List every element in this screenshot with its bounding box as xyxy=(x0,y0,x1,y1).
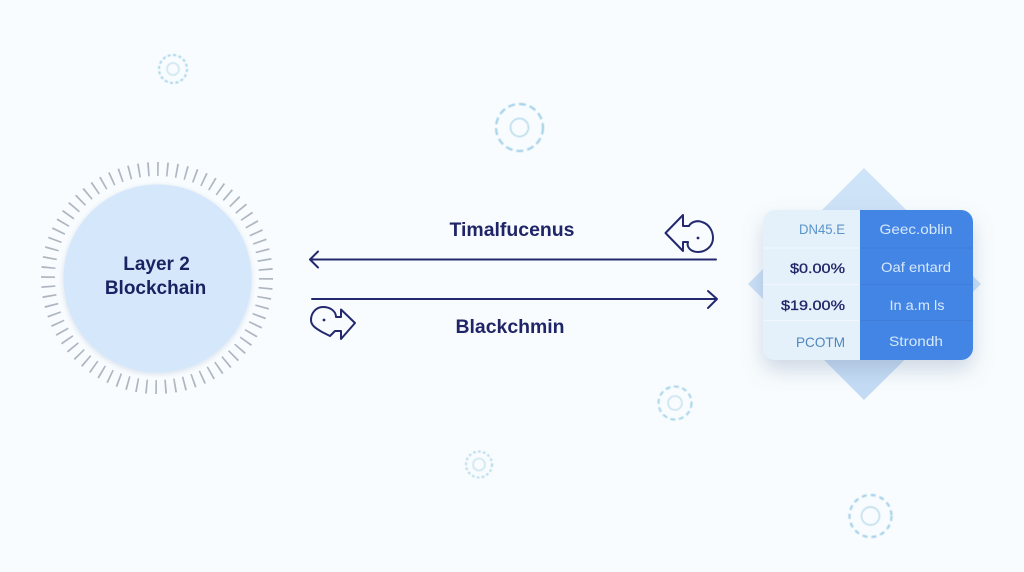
left column values: $0.00% xyxy=(790,260,845,276)
disc label: Layer 2 xyxy=(123,254,190,275)
left column values: $19.00% xyxy=(781,297,845,313)
right column values: Geec.oblin xyxy=(880,221,952,237)
arrow: right to left xyxy=(310,252,716,268)
table left column xyxy=(763,210,973,360)
icon: left-pointing arrow head xyxy=(666,215,713,252)
left column values: DN45.E xyxy=(799,221,845,237)
right column values: Oaf entard xyxy=(881,259,951,275)
disc label second line: Blockchain xyxy=(105,278,206,299)
tick ring xyxy=(48,169,266,387)
icon: node top centre xyxy=(496,104,543,151)
panel: data table xyxy=(748,168,981,400)
blockchain disc xyxy=(62,184,252,375)
right column values: In a.m ls xyxy=(890,297,944,313)
icon: node bottom right xyxy=(850,495,892,537)
table right column xyxy=(860,210,973,360)
icon: node top left xyxy=(159,55,187,83)
backing diamond xyxy=(748,168,981,400)
heading: bottom arrow label: Blackchmin xyxy=(456,317,564,338)
icon: node lower centre xyxy=(466,452,492,478)
right column values xyxy=(880,221,952,349)
panel: layer 2 blockchain dial xyxy=(48,169,266,387)
left column values xyxy=(781,221,845,350)
left column values: PCOTM xyxy=(796,334,845,350)
right column values: Strondh xyxy=(889,333,943,349)
icon: right-pointing arrow head xyxy=(311,307,355,339)
row dividers xyxy=(763,248,973,320)
arrow: left to right xyxy=(312,291,717,308)
heading: top arrow label: Timalfucenus xyxy=(450,220,574,241)
icon: node lower right xyxy=(658,386,692,420)
